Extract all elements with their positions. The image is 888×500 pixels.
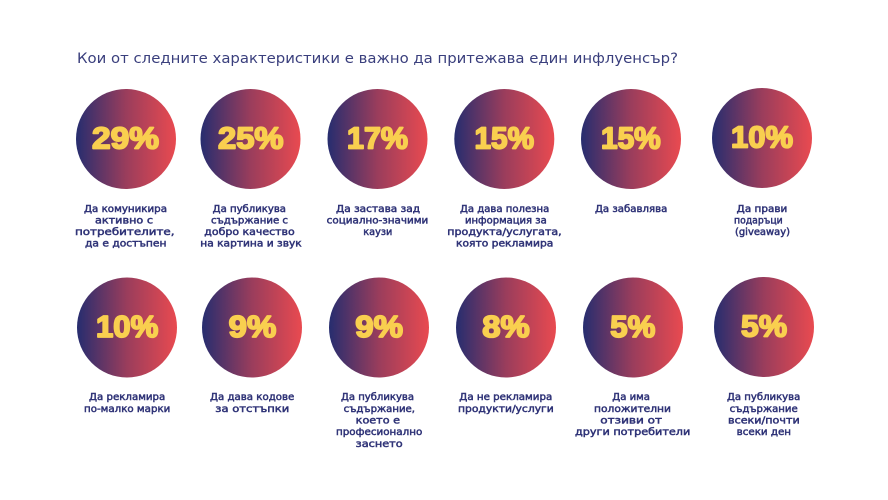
label: отзиви от	[600, 416, 662, 426]
label: положителни	[594, 404, 671, 415]
panel: 10% fewer brands	[77, 278, 177, 415]
label	[75, 204, 174, 250]
number: 9%	[355, 309, 403, 344]
label: Да застава зад	[336, 204, 420, 215]
label: Да публикува	[727, 392, 800, 403]
label	[447, 204, 562, 250]
number: 25%	[218, 120, 284, 156]
label	[336, 392, 422, 450]
label: Да забавлява	[595, 204, 667, 215]
circle	[328, 89, 428, 189]
label: каузи	[363, 227, 392, 238]
number: 15%	[601, 120, 661, 156]
circle	[583, 278, 683, 378]
label	[200, 204, 302, 250]
label: информация за	[465, 216, 547, 226]
label: Да комуникира	[84, 204, 167, 215]
label: потребителите,	[75, 227, 174, 238]
number: 10%	[96, 309, 158, 344]
panel: 5% daily content	[714, 277, 814, 438]
label: други потребители	[575, 427, 690, 438]
circle	[456, 278, 556, 378]
circle	[454, 89, 554, 189]
label: съдържание,	[344, 404, 415, 415]
label: Да дава кодове	[210, 392, 294, 403]
panel: 10% giveaway	[712, 88, 812, 238]
label: което е	[356, 416, 400, 426]
number: 5%	[741, 308, 787, 344]
number: 5%	[610, 309, 655, 344]
panel: 5% reviews	[575, 278, 690, 438]
number: 10%	[731, 120, 793, 154]
number: 15%	[474, 120, 534, 156]
label	[84, 392, 170, 415]
label: по-малко марки	[84, 404, 170, 415]
label: Да публикува	[213, 204, 286, 215]
circle	[329, 278, 429, 378]
label: да е достъпен	[85, 238, 166, 250]
label: Да има	[612, 392, 650, 403]
label	[727, 392, 800, 438]
label: която рекламира	[456, 238, 553, 250]
label	[327, 204, 428, 238]
circle	[581, 89, 681, 189]
label: Да публикува	[341, 392, 414, 403]
title: Кои от следните характеристики е важно да притежава един инфлуенсър?	[77, 51, 678, 67]
label: (giveaway)	[735, 227, 790, 238]
number: 8%	[482, 309, 530, 344]
label: всеки/почти	[728, 416, 800, 426]
label: Да прави	[737, 204, 787, 215]
label: професионално	[336, 427, 422, 438]
label: активно с	[95, 216, 153, 226]
label: добро качество	[204, 227, 295, 238]
panel: 9% professional	[329, 278, 429, 450]
label: на картина и звук	[200, 238, 302, 250]
label: Да не рекламира	[459, 392, 552, 403]
label: всеки ден	[737, 427, 791, 438]
panel: 29%	[75, 89, 176, 250]
label: продукта/услугата,	[447, 227, 562, 238]
circle	[77, 278, 177, 378]
label: социално-значими	[327, 216, 428, 226]
label: продукти/услуги	[458, 404, 554, 415]
panel: 17%	[327, 89, 428, 238]
circle	[714, 277, 814, 377]
circle	[712, 88, 812, 188]
number: 29%	[92, 120, 159, 156]
panel: 9% codes	[202, 278, 302, 415]
label: за отстъпки	[215, 404, 289, 415]
label	[734, 204, 790, 238]
panel: 25%	[200, 89, 302, 250]
panel: 15% fun	[581, 89, 681, 215]
label	[575, 392, 690, 438]
label: подаръци	[734, 216, 783, 226]
label	[210, 392, 294, 415]
label: Да рекламира	[89, 392, 165, 403]
label: съдържание	[730, 404, 798, 415]
circle	[76, 89, 176, 189]
label: заснето	[356, 439, 403, 450]
number: 17%	[347, 120, 408, 156]
panel: 15% information	[447, 89, 562, 250]
circle	[200, 89, 300, 189]
label	[458, 392, 554, 415]
number: 9%	[229, 309, 276, 344]
label: съдържание с	[211, 216, 288, 226]
circle	[202, 278, 302, 378]
label: Да дава полезна	[460, 204, 549, 215]
panel: 8% no ads	[456, 278, 556, 415]
